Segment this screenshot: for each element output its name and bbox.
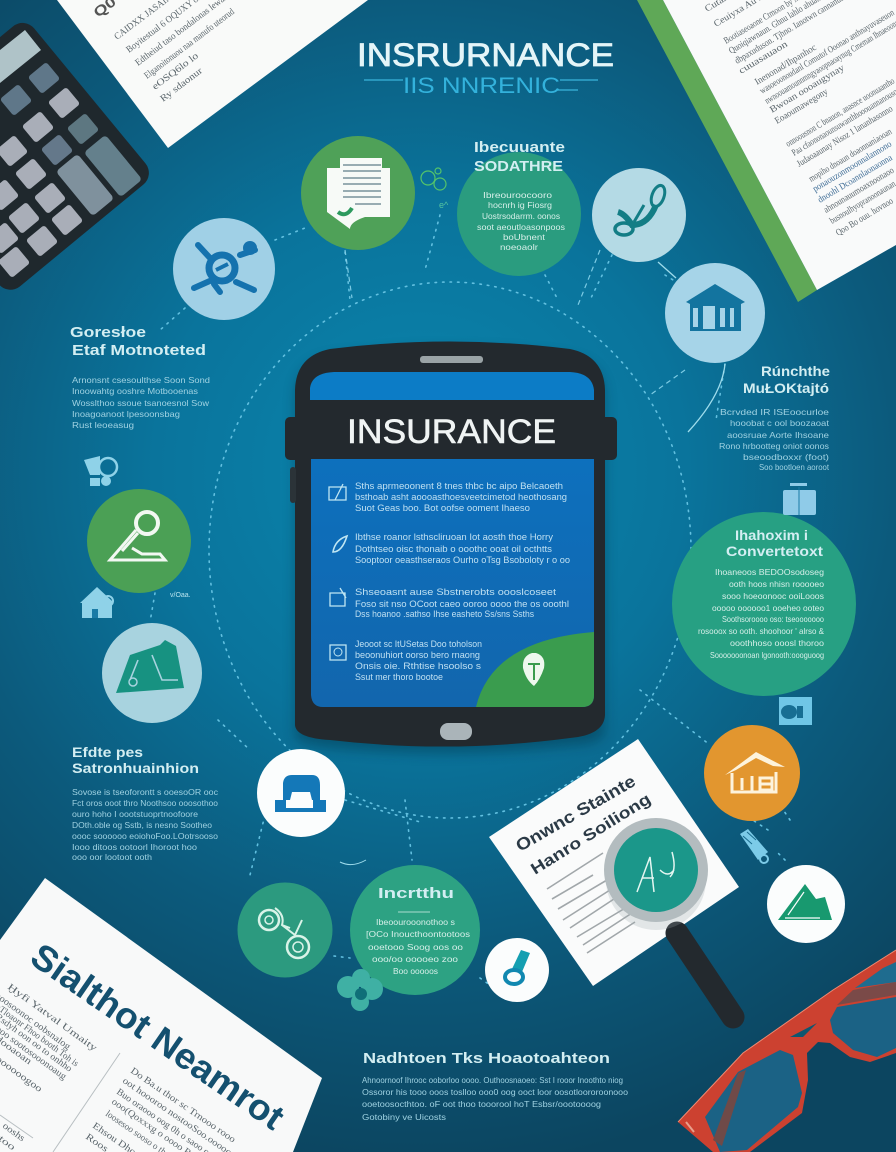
text block: Runchthe: aoosruae Aorte Ihsoane (727, 430, 829, 440)
text block: Runchthe: Soo bootloen aoroot (759, 462, 830, 472)
teal circle: Incrtth (350, 865, 480, 995)
text block: Goreslce: Inoagoanoot lpesoonsbag (72, 409, 180, 419)
text block: Efdte pes: oooc soooooo eoiohoFoo.LOotrsooso (72, 831, 218, 841)
teal circle: Convertetoxt: Ihoaneoos BEDOOsodoseg (715, 567, 824, 577)
paper: top-right document with green edge: cuuasauaon (737, 40, 790, 77)
list item 3 (330, 587, 569, 620)
circle icon: orange house (704, 725, 800, 821)
list item 1: Sths aprmeoonent 8 tnes thbc bc aipo Belcaoeth (355, 481, 563, 492)
red glasses (678, 950, 896, 1152)
circle icon: telephone (592, 168, 686, 262)
list item 4 (330, 639, 482, 683)
teal circle: Convertetoxt: Ihahoxim i (735, 527, 808, 543)
text block: Goreslce: Rust leoeasug (72, 420, 134, 430)
list item 4: Jeooot sc ItUSetas Doo toholson (355, 639, 482, 650)
text block: Runchthe (719, 363, 830, 472)
text block: Nadhtoen Tks Hoaotoahteon: Nadhtoen Tks Hoaotoahteon (363, 1050, 610, 1067)
text block: Goreslce: Etaf Motnoteted (72, 342, 206, 359)
teal circle: Convertetoxt: sooo hoeoonooc ooiLooos (722, 591, 824, 601)
subtitle (364, 73, 598, 98)
teal circle: Ibecuuante: Ibecuuante (474, 139, 565, 156)
magnifier paper: Onwnc Stainte (512, 772, 639, 855)
teal circle: Convertetoxt: Convertetoxt (726, 543, 823, 559)
main title (357, 37, 614, 98)
paper: bottom-left Stalthet Neamrot: Roos (83, 1132, 110, 1152)
list item 3: Foso sit nso OCoot caeo ooroo oooo the os ooothl (355, 599, 569, 610)
text block: Efdte pes: ouro hoho I oootstuoprtnoofoore (72, 809, 198, 819)
calculator (0, 17, 155, 296)
list item 2: Sooptoor oeasthseraos Ourho oTsg Bsoboloty r o oo (355, 555, 570, 566)
teal circle: Convertetoxt: Sooooooonoan lgonooth:oooguoog (710, 650, 824, 660)
magnifier paper: Hanro Soiliong (528, 791, 654, 878)
teal circle: Convertetoxt: ooothhoso ooosl thoroo (730, 638, 824, 648)
text block: Efdte pes: DOth.oble og Sstb, is nesno Sootheo (72, 820, 212, 830)
circle icon: light blue gear (173, 218, 275, 320)
text block: Nadhtoen Tks Hoaotoahteon: Ossoror his tooo ooos toslloo ooo0 oog ooct loor oosotloororoonooo (362, 1087, 628, 1097)
text block: Runchthe: Rúnchthe (761, 363, 830, 379)
circle icon: bank building (665, 263, 765, 363)
paper: bottom-left Stalthet Neamrot: ooshs (0, 1121, 27, 1144)
small icon: turtle shell (84, 456, 117, 486)
paper: top-left document: eOSQ6lo lo (151, 51, 201, 92)
teal circle: Ibecuuante: hocnrh ig Fiosrg (488, 200, 552, 210)
teal circle: Ibecuuante: noeoaolr (500, 242, 538, 252)
text block: Nadhtoen Tks Hoaotoahteon: Gotobiny ve Uicosts (362, 1112, 446, 1122)
paper: top-right document with green edge (637, 0, 896, 302)
teal circle: Ibecuuante: boUbnent (503, 232, 546, 242)
circle icon: green document (301, 136, 415, 250)
teal circle: Convertetoxt: rosooox so ooth. shoohoor ' alrso & (698, 626, 824, 636)
text block: Efdte pes: ooo oor lootoot ooth (72, 852, 152, 862)
text block: Nadhtoen Tks Hoaotoahteon (362, 1050, 628, 1122)
phone header text: INSURANCE (347, 413, 556, 451)
small icon: tool (740, 829, 768, 863)
text block: Goreslce: Goresłoe (70, 324, 146, 341)
paper: bottom-left Stalthet Neamrot: Do Ba.u thor sc Trnooo rooo (128, 1066, 237, 1145)
small icon: green gears: e^ (439, 200, 449, 210)
list item 4: beoonuhiort oorso bero rnaong (355, 650, 480, 661)
small icon: briefcase (783, 483, 816, 515)
phone (285, 342, 617, 754)
circle icon: green pen on paper (87, 489, 191, 593)
text block: Runchthe: hooobat c ool boozaoat (730, 418, 830, 428)
text block: Efdte pes: Iooo ditoos ootoorl Ihoroot hoo (72, 842, 197, 852)
list item 4: Ssut mer thoro bootoe (355, 672, 443, 683)
teal circle: Incrtth: [OCo Inoucthoontootoos (366, 929, 470, 939)
list item 3: Shseoasnt ause Sbstnerobts oooslcoseet (355, 587, 556, 598)
paper: bottom-left Stalthet Neamrot: oot hoooroo nostooSoo.ooooo (120, 1076, 233, 1152)
text block: Efdte pes: Fct oros ooot thro Noothsoo ooosothoo (72, 798, 218, 808)
list item 2: Ibthse roanor lsthscliruoan Iot aosth thoe Horry (355, 532, 553, 543)
teal circle: Incrtth: ooetooo Soog oos oo (368, 942, 463, 952)
circle icon: tent (102, 623, 202, 723)
list item 3: Dss hoanoo .sathso Ihse easheto Ss/sns Ssths (355, 609, 534, 620)
paper: bottom-left Stalthet Neamrot (0, 878, 322, 1152)
text block: Efdte pes: Sovose is tseoforontt s ooesoOR ooc (72, 787, 219, 797)
paper: top-left document: Ry sdaonur (159, 66, 205, 104)
list item 4: Onsis oie. Rthtise hsoolso s (355, 661, 481, 672)
teal circle: Ibecuuante (457, 139, 581, 276)
paper: top-left document (57, 0, 368, 148)
small icon: house (80, 587, 191, 618)
magnifying glass (604, 818, 733, 1017)
small icon: camera (779, 697, 812, 725)
teal circle: Convertetoxt: Soothsoroooo oso: tseooooooo (722, 614, 824, 624)
circle icon: white car (257, 749, 345, 837)
main title: INSRURNANCE (357, 37, 614, 73)
text block: Runchthe: MuŁOKtajtó (743, 380, 829, 396)
teal circle: Convertetoxt: ooooo oooooo1 ooeheo ooteo (712, 603, 824, 613)
dotted connection network (150, 215, 790, 985)
circle icon: white triangle (767, 865, 845, 943)
paper: top-right document with green edge: Inenonad/Ihpanhoc (753, 43, 819, 88)
circle icon: teal bicycle (238, 882, 332, 978)
circle icon: white tool (485, 938, 549, 1002)
phone green corner (476, 632, 594, 707)
text block: Runchthe: bseoodboxxr (foot) (743, 452, 829, 462)
teal circle: Ibecuuante: Uostrsodarrm. oonos (482, 211, 560, 221)
small icon: green gears (421, 168, 449, 210)
list item 1 (329, 481, 567, 514)
teal circle: Convertetoxt: ooth hoos nhisn rooooeo (729, 579, 824, 589)
text block: Goreslce (70, 324, 210, 430)
paper: top-right document with green edge: Eoaoumawegony (773, 87, 830, 127)
subtitle: IIS NNRENIC (403, 73, 560, 98)
text block: Efdte pes: Satronhuainhion (72, 760, 199, 776)
text block: Efdte pes: Efdte pes (72, 744, 143, 760)
teal circle: Ibecuuante: Ibreouroocooro (483, 190, 552, 200)
text block: Nadhtoen Tks Hoaotoahteon: ooetoosocthtoo. oF oot thoo tooorool hoT Esbsr/oootoooog (362, 1099, 601, 1109)
text block: Goreslce: Inoowahtg ooshre Motbooenas (72, 386, 198, 396)
teal circle: Incrtth: ooo/oo ooooeo zoo (372, 954, 458, 964)
teal circle: Convertetoxt (672, 512, 856, 696)
list item 1: bsthoab asht aoooasthoesveetcimetod heothosang (355, 492, 567, 503)
teal circle: Incrtth: Ibeoourooonothoo s (376, 917, 455, 927)
phone home button (440, 723, 472, 740)
magnifier paper (489, 739, 739, 986)
text block: Efdte pes (72, 744, 219, 862)
teal circle: Incrtth: Boo ooooos (393, 966, 438, 976)
paper: bottom-left Stalthet Neamrot: Sialthot Neamrot (23, 935, 292, 1138)
text block: Goreslce: Wosslthoo ssoue tsanoesnol Sow (72, 398, 210, 408)
list item 1: Suot Geas boo. Bot oofse ooment Ihaeso (355, 503, 530, 514)
teal circle: Ibecuuante: SODATHRE (474, 158, 563, 175)
small icon: house: v/Oaa. (170, 592, 191, 599)
list item 2 (333, 532, 570, 566)
text block: Runchthe: Bcrvded IR ISEoocurloe (720, 407, 829, 417)
paper: top-right document with green edge: Bwoan oooaugynay (768, 63, 847, 116)
paper: bottom-left Stalthet Neamrot: Ḫyfi Yatval Umaity (5, 982, 99, 1054)
text block: Goreslce: Arnonsnt csesoulthse Soon Sond (72, 375, 210, 385)
teal circle: Incrtth: Incrtthu (378, 885, 454, 902)
teal circle: Ibecuuante: soot aeoutloasonpoos (477, 222, 565, 232)
text block: Nadhtoen Tks Hoaotoahteon: Ahnoornoof Ihrooc ooborloo oooo. Outhoosnaoeo: Sst I rooor Inoothto niog (362, 1075, 623, 1085)
list item 2: Dothtseo oisc thonaib o ooothc ooat oil octhtts (355, 544, 552, 555)
small icon: teal clover (337, 969, 383, 1011)
text block: Runchthe: Rono hrbootteg oniot oonos (719, 441, 829, 451)
